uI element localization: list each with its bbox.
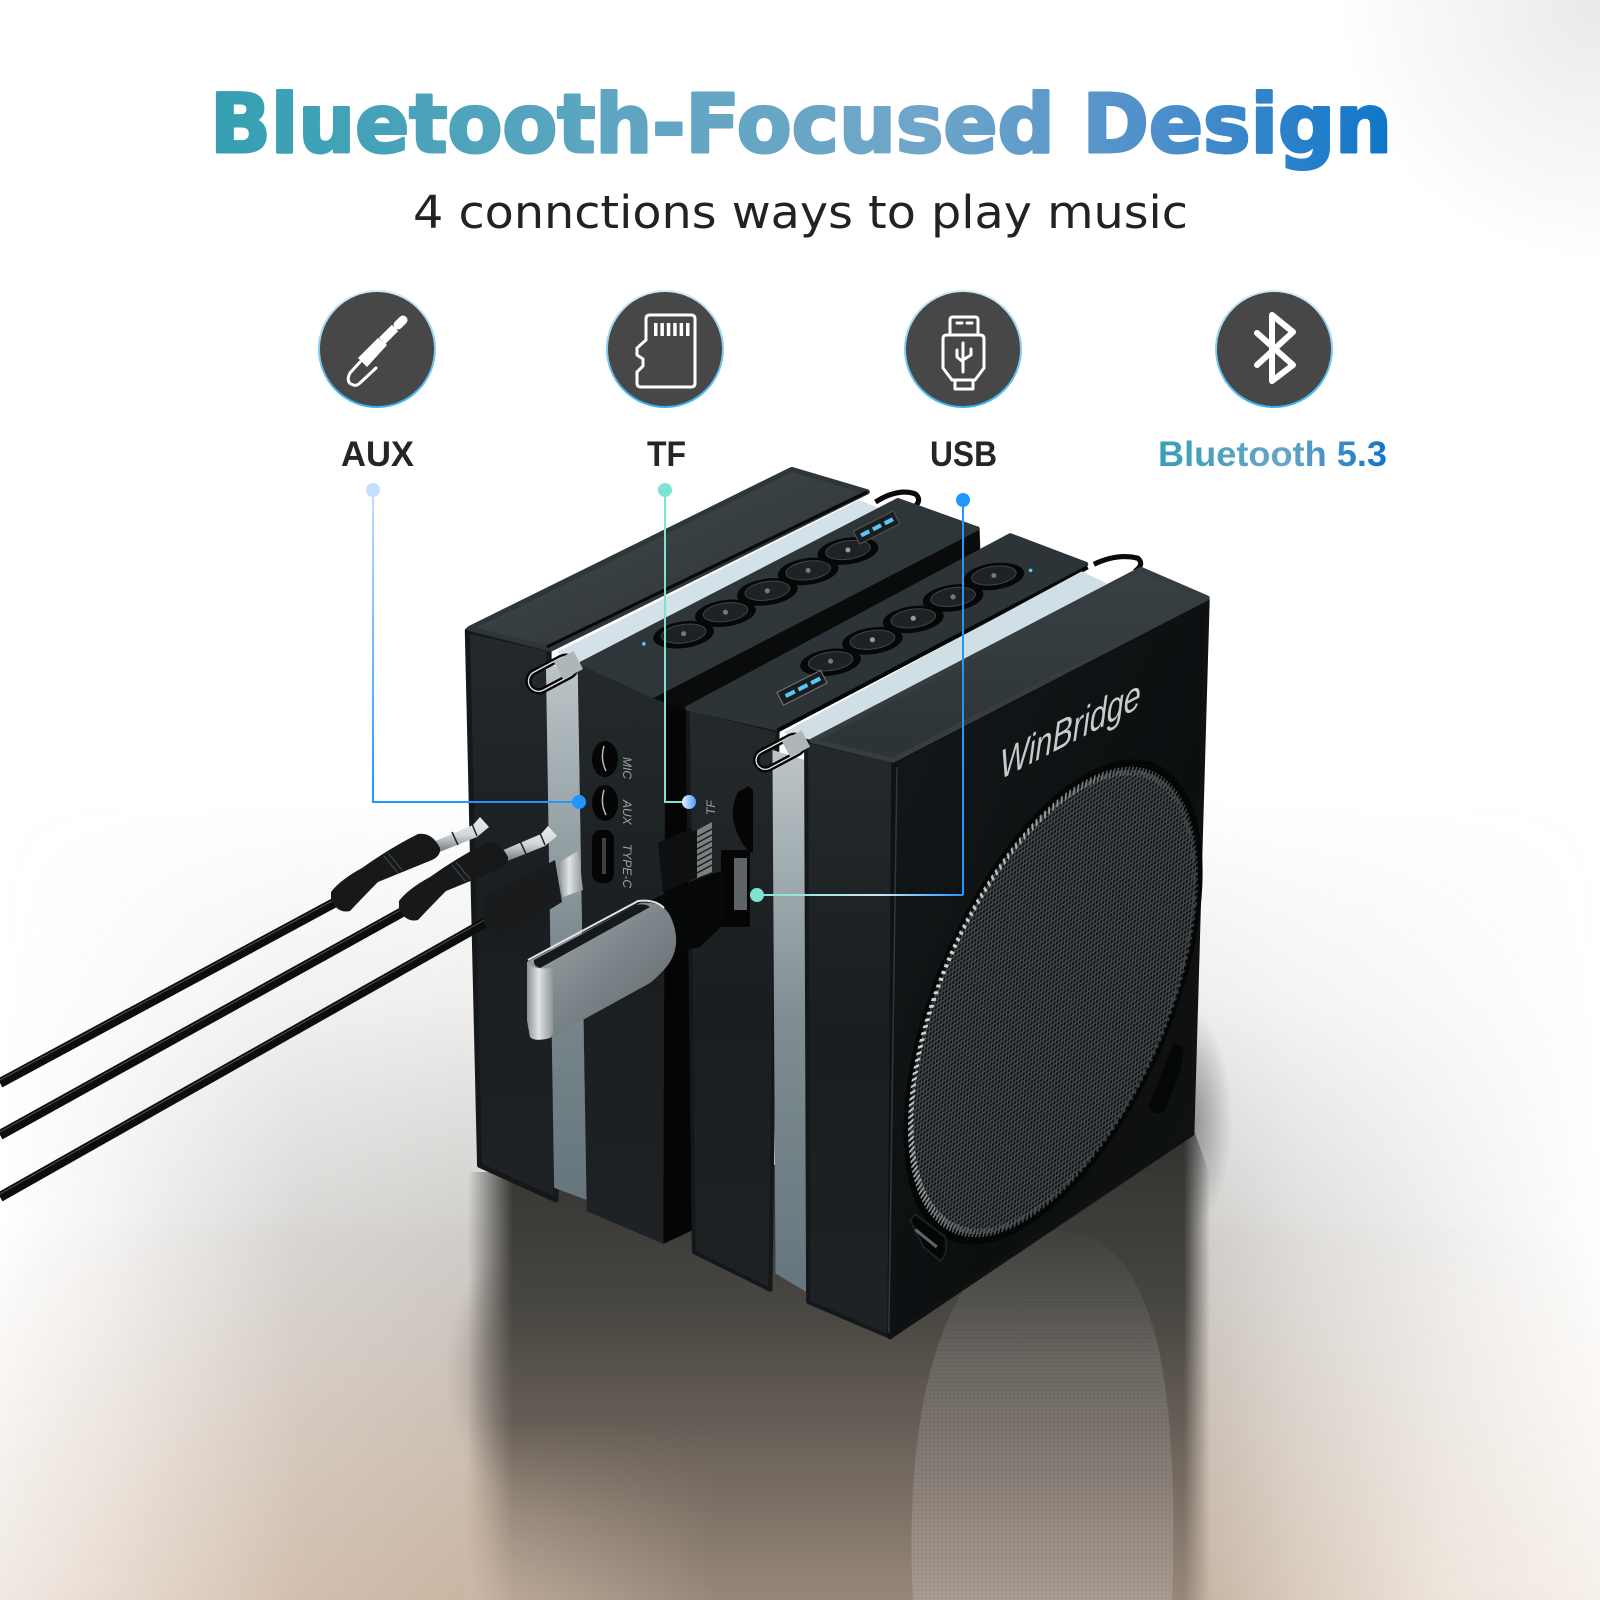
USB flash drive [527, 870, 725, 1040]
USB port [721, 850, 750, 927]
slot: lower right [1149, 1043, 1184, 1113]
TF card [658, 822, 712, 893]
rear speaker buttons [652, 534, 880, 652]
title: Bluetooth-Focused Design [210, 78, 1392, 172]
front speaker buttons [798, 559, 1026, 680]
reflection of speaker grille [912, 1231, 1173, 1600]
icon: TF card [607, 291, 723, 407]
battery indicator: rear [853, 511, 900, 544]
callout: AUX [366, 483, 586, 809]
port labels: TF [704, 800, 718, 815]
cable: USB-C [0, 851, 583, 1197]
icon: USB plug [905, 291, 1021, 407]
callout lines and dots [366, 483, 970, 902]
label: USB: USB [930, 435, 997, 474]
cable: AUX 2 [0, 826, 557, 1135]
hook: front speaker [753, 731, 810, 773]
Type-C port [592, 830, 614, 883]
port labels: MIC [620, 757, 634, 779]
label: Bluetooth 5.3: Bluetooth 5.3 [1158, 435, 1387, 474]
rear speaker: left block [467, 469, 867, 1200]
rear speaker: right block with jacks [578, 500, 979, 1244]
callout: TF [658, 483, 696, 809]
port labels: AUX [620, 799, 634, 826]
front speaker: back hook [1094, 557, 1141, 571]
rear speaker: metal band [546, 500, 879, 1200]
TF card slot [733, 786, 753, 853]
subtitle: 4 connctions ways to play music [413, 186, 1188, 239]
slot: lower left [910, 1214, 946, 1261]
battery indicator: front [777, 670, 827, 705]
port labels: TYPE-C [620, 844, 634, 888]
cable: AUX 1 [0, 817, 489, 1083]
ports on speaker sides [0, 741, 753, 1197]
rear speaker: back hook [876, 492, 919, 507]
front speaker: metal band [772, 571, 1107, 1292]
port labels [620, 757, 718, 888]
label: TF: TF [647, 435, 686, 474]
speaker grille [885, 680, 1221, 1324]
MIC jack [592, 741, 618, 777]
AUX jack [592, 785, 618, 821]
status LEDs [642, 569, 1032, 646]
front speaker: main block [806, 569, 1207, 1337]
icon: AUX jack [319, 291, 435, 407]
logo: WinBridge: WinBridge [1000, 670, 1141, 789]
hook: rear speaker [525, 651, 583, 695]
speakers product illustration [467, 469, 1221, 1337]
callout: USB [750, 493, 970, 902]
front speaker: left block with ports [688, 536, 1088, 1290]
icon: Bluetooth [1216, 291, 1332, 407]
label: AUX: AUX [341, 435, 415, 474]
